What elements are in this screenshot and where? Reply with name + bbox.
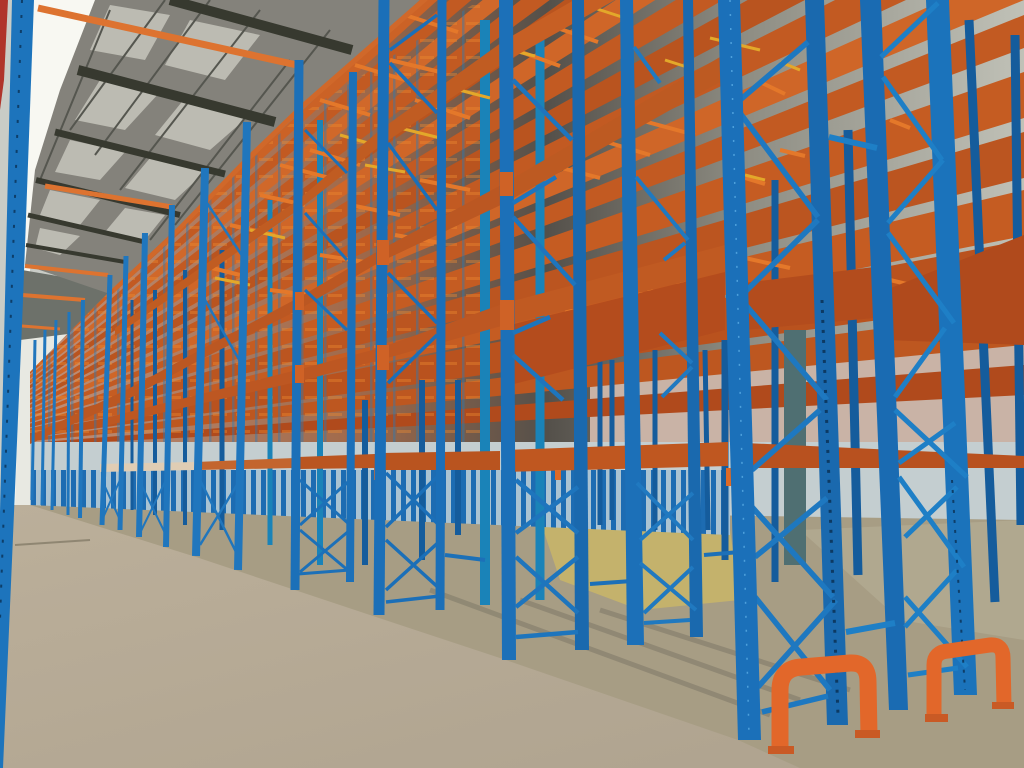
bay rear right D-E bbox=[829, 0, 977, 710]
rear beams: fan of orange rows receding to the far end bbox=[0, 0, 1024, 450]
bay G-H bbox=[620, 0, 703, 645]
racks background: gaps showing roof and structure through the shelving bbox=[30, 0, 1024, 535]
floor: concrete aisle and shaded floor under the racks bbox=[0, 505, 1024, 768]
left foreground upright bbox=[0, 0, 34, 768]
far shelving detail: fine mesh of blue uprights and orange bars bbox=[30, 0, 480, 442]
back uprights: distant blue columns bbox=[132, 20, 1021, 605]
bottom beam: lowest orange level bbox=[100, 442, 1024, 486]
main orange beams: front rack levels bbox=[30, 0, 1024, 444]
connecting frame ties bbox=[445, 552, 740, 584]
pallet support bars: short orange and yellow cross members bbox=[200, 15, 915, 315]
bay K-L bbox=[379, 0, 442, 615]
bay M-N bbox=[295, 60, 353, 590]
bay I-J bbox=[295, 0, 589, 660]
roof: corrugated ceiling panels bbox=[22, 0, 430, 329]
bay front A-B bbox=[718, 0, 848, 740]
distant bays at the far end of the row bbox=[32, 122, 247, 570]
safety barrier: front orange guard bbox=[768, 663, 880, 754]
safety barrier: rear orange guard bbox=[925, 645, 1014, 722]
